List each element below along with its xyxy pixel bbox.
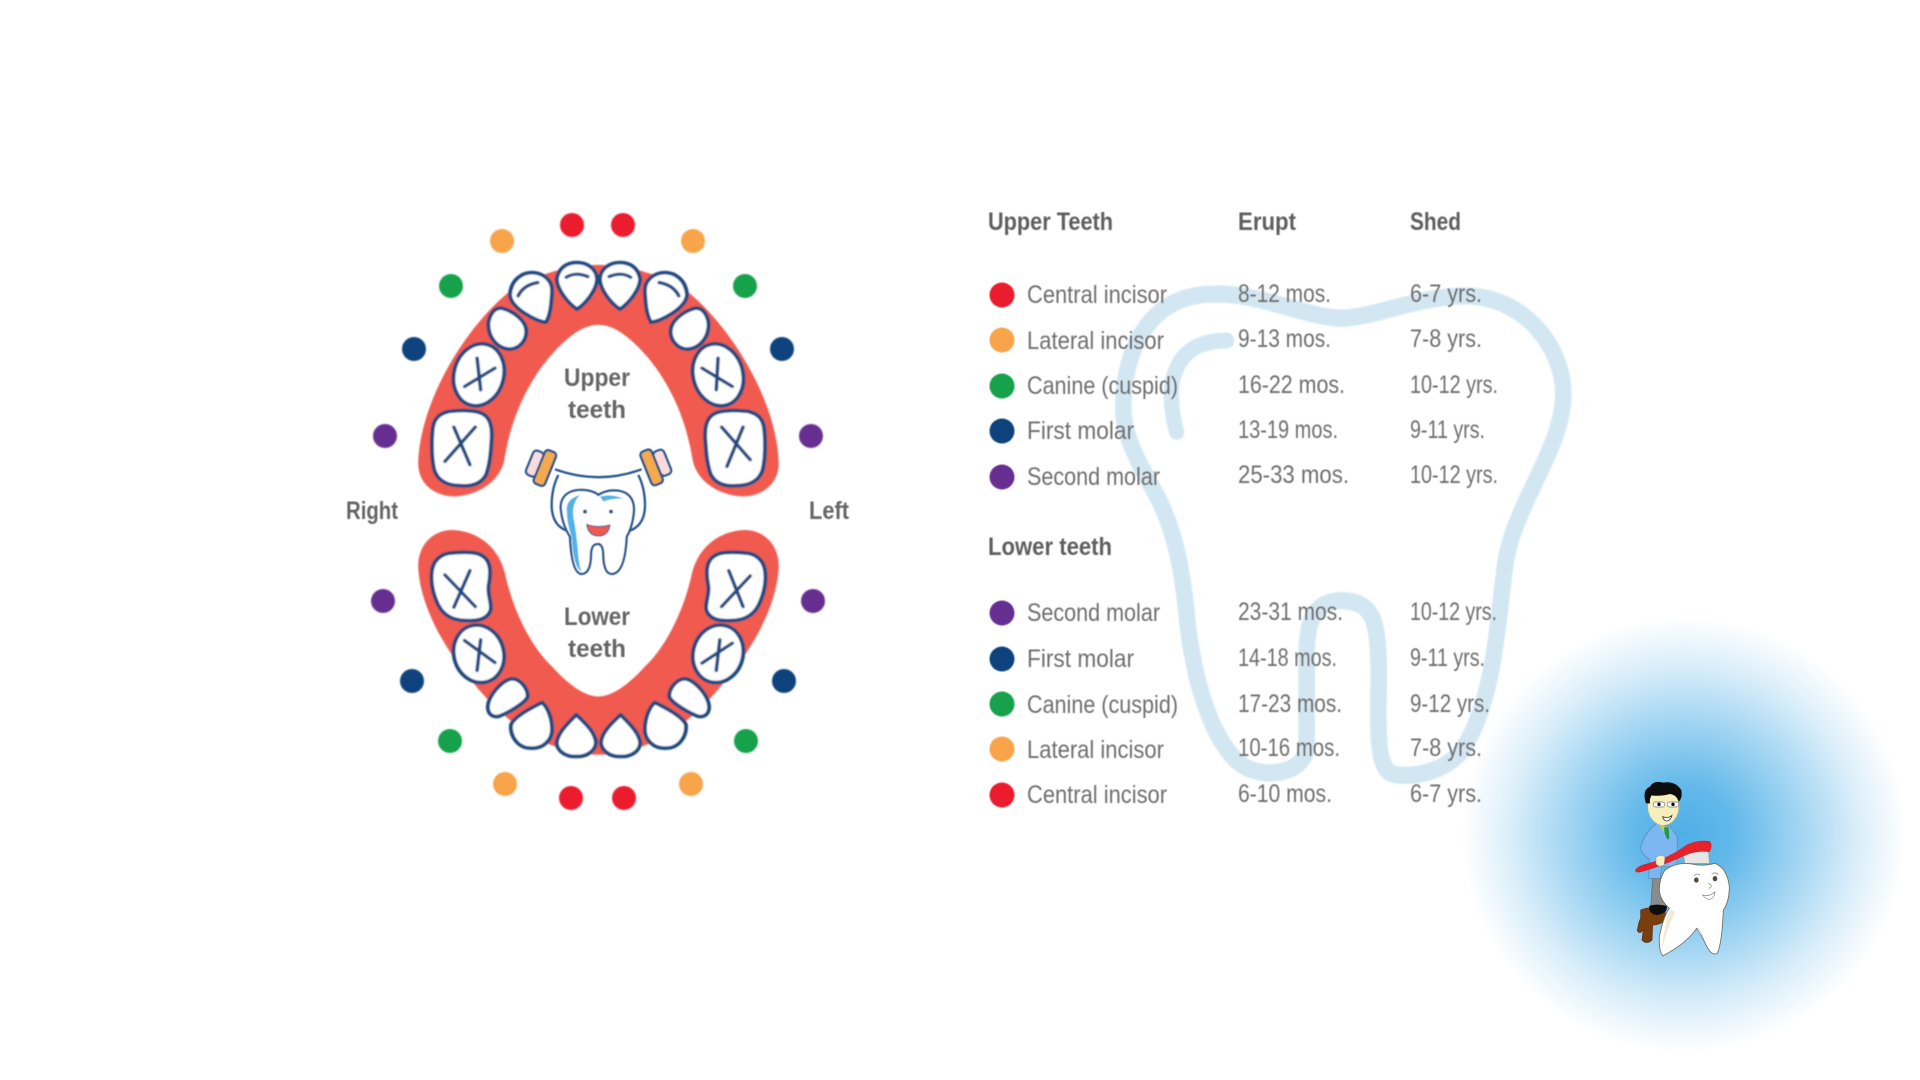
lower right-side teeth (viewer left): [431, 552, 596, 756]
mouth diagram labels: Lower: [564, 603, 630, 631]
table: lower teeth rows: 9-12 yrs.: [1410, 690, 1490, 718]
table: upper teeth headers: [988, 208, 1461, 236]
table: upper teeth rows: Lateral incisor: [1027, 327, 1164, 355]
mouth diagram labels: Left: [809, 497, 850, 525]
left weights: [523, 445, 557, 487]
table: upper teeth headers: Erupt: [1238, 208, 1297, 236]
table: upper teeth rows: Canine (cuspid): [1027, 372, 1178, 400]
giant tooth: [1659, 863, 1729, 956]
table: upper teeth rows: [990, 280, 1498, 491]
upper gum and teeth: [418, 263, 779, 496]
table: lower teeth rows: 9-11 yrs.: [1410, 644, 1485, 672]
table: lower teeth heading: Lower teeth: [988, 533, 1112, 561]
table: upper teeth rows: 7-8 yrs.: [1410, 325, 1482, 353]
table: upper teeth rows: 8-12 mos.: [1238, 280, 1331, 308]
brush bristles: [1683, 850, 1709, 863]
table: lower teeth rows: 14-18 mos.: [1238, 644, 1337, 672]
lower tooth grooves: [445, 571, 750, 670]
table: upper teeth headers: Upper Teeth: [988, 208, 1113, 236]
table: lower teeth rows: Lateral incisor: [1027, 736, 1164, 764]
stool: [1637, 908, 1666, 942]
upper tooth grooves: [445, 274, 750, 466]
table: upper teeth rows: 16-22 mos.: [1238, 371, 1345, 399]
table: lower teeth rows: 23-31 mos.: [1238, 598, 1343, 626]
lower left-side teeth (viewer right): [601, 552, 765, 756]
lab coat: [1641, 823, 1677, 878]
lower colour dots: [371, 589, 825, 810]
mouth diagram labels: Right: [346, 497, 399, 525]
trousers: [1651, 878, 1666, 907]
upper gum: [418, 265, 779, 496]
table: upper teeth rows: First molar: [1027, 417, 1134, 445]
icon: tooth lifting barbell: [523, 444, 674, 574]
tooth eyes: [1694, 876, 1717, 883]
table: lower teeth rows: 17-23 mos.: [1238, 690, 1342, 718]
mouth: [587, 524, 610, 536]
table: upper teeth rows: 9-13 mos.: [1238, 325, 1331, 353]
table: upper teeth rows: 10-12 yrs.: [1410, 461, 1498, 489]
smile: [1663, 815, 1672, 821]
table: upper teeth rows: 13-19 mos.: [1238, 416, 1338, 444]
mouth diagram labels: Upper: [564, 364, 630, 392]
right weights: [639, 444, 674, 486]
watermark tooth outline: [1123, 294, 1563, 775]
upper left-side teeth (viewer right): [600, 263, 765, 486]
table: upper teeth rows: Second molar: [1027, 463, 1160, 491]
table: upper teeth rows: Central incisor: [1027, 281, 1167, 309]
upper right-side teeth (viewer left): [432, 263, 597, 486]
mouth diagram labels: [346, 364, 850, 663]
hand: [1656, 855, 1665, 866]
lower gum and teeth: [418, 530, 779, 756]
lower gum: [418, 530, 779, 755]
tie: [1664, 827, 1669, 839]
table: lower teeth rows: First molar: [1027, 645, 1134, 673]
mouth diagram labels: teeth: [568, 635, 626, 663]
table: lower teeth rows: 6-7 yrs.: [1410, 780, 1482, 808]
tooth body: [561, 490, 634, 574]
table: lower teeth rows: 10-12 yrs.: [1410, 598, 1497, 626]
face: [1648, 787, 1679, 825]
table: lower teeth rows: [990, 598, 1497, 809]
tooth shadow: [1661, 910, 1703, 952]
barbell bar and arms: [552, 469, 645, 531]
table: lower teeth rows: 10-16 mos.: [1238, 734, 1340, 762]
table: upper teeth rows: 6-7 yrs.: [1410, 280, 1482, 308]
table: upper teeth headers: Shed: [1410, 208, 1461, 236]
table: upper teeth rows: 9-11 yrs.: [1410, 416, 1485, 444]
upper colour dots: [373, 213, 823, 448]
table: lower teeth rows: Central incisor: [1027, 781, 1167, 809]
mouth diagram labels: teeth: [568, 396, 626, 424]
pupils: [1657, 803, 1675, 806]
blue radial glow: [1462, 617, 1906, 1053]
table: lower teeth rows: Second molar: [1027, 599, 1160, 627]
table: lower teeth rows: 7-8 yrs.: [1410, 734, 1482, 762]
tooth shading: [567, 495, 623, 572]
shirt: [1658, 823, 1668, 835]
toothbrush: [1635, 841, 1711, 872]
tooth face lines: [1694, 873, 1718, 899]
table: upper teeth rows: 10-12 yrs.: [1410, 371, 1498, 399]
hair: [1645, 782, 1682, 803]
shoe: [1649, 905, 1667, 915]
glasses: [1653, 802, 1679, 807]
table: upper teeth rows: 25-33 mos.: [1238, 461, 1349, 489]
table: lower teeth rows: Canine (cuspid): [1027, 691, 1178, 719]
icon: dentist brushing a giant tooth: [1635, 782, 1729, 956]
eyes: [583, 510, 613, 514]
table: lower teeth rows: 6-10 mos.: [1238, 780, 1332, 808]
